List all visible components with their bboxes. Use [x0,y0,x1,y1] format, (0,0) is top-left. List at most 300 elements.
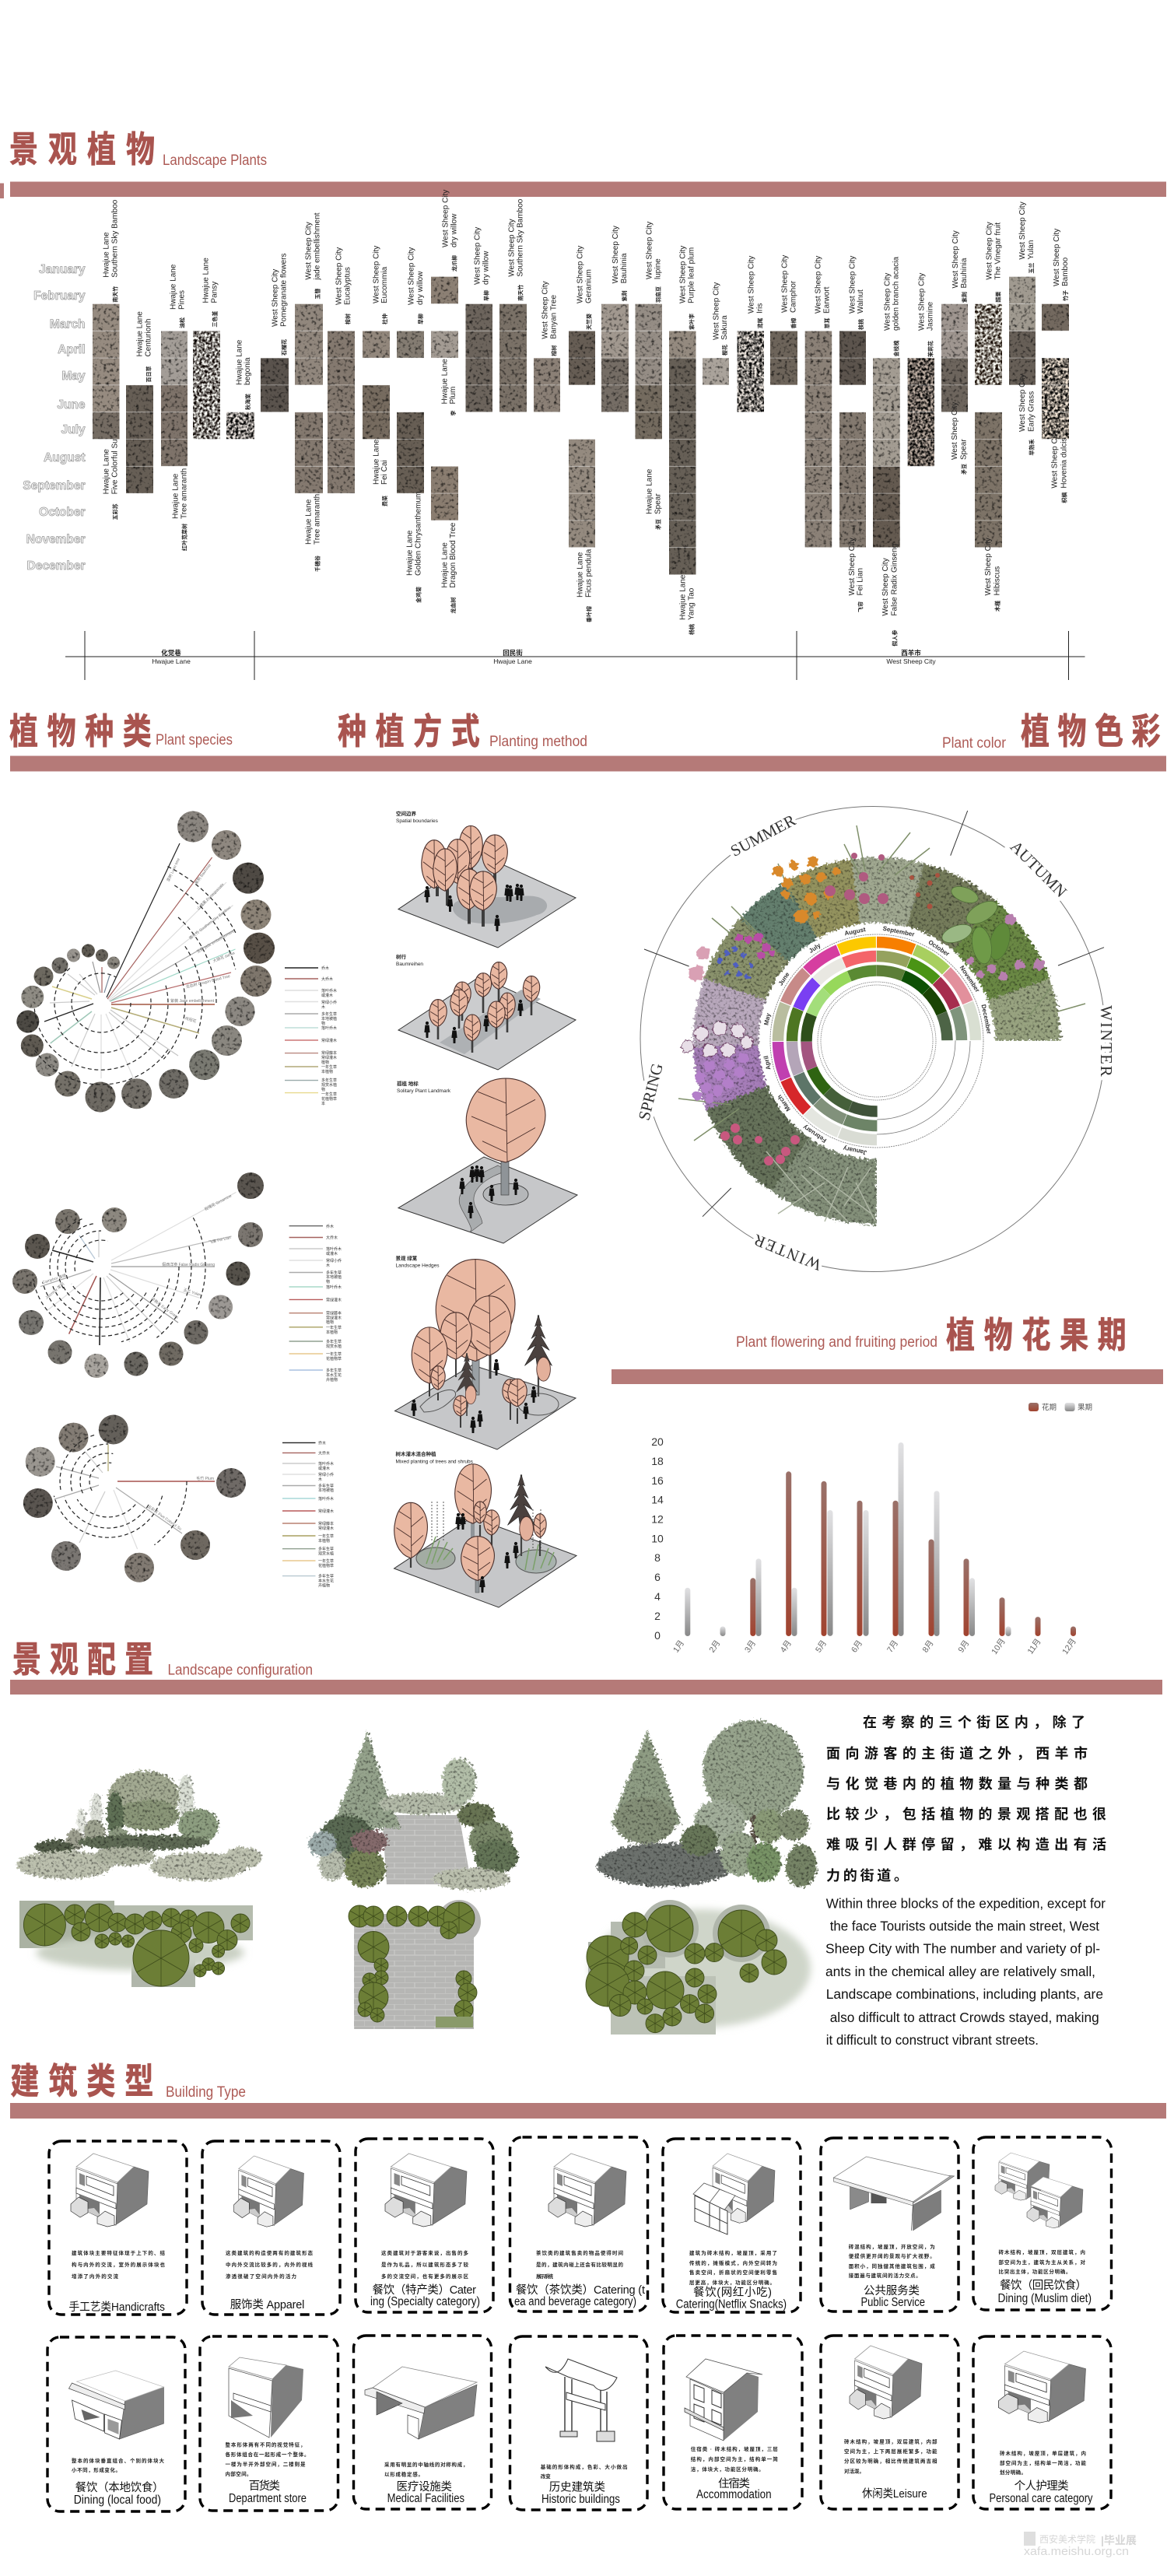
caption: 砖混结构，坡屋顶，开放空间，为 [849,2243,935,2250]
legend: 多年生草 [318,1574,334,1579]
label: Purple leaf plum [678,246,696,330]
month labels on wheel: February [801,1123,828,1144]
label: Tree amaranth 2: Tree amaranth [313,494,322,545]
label: Sakura: Sakura [720,315,729,340]
legend: 物 [321,1087,325,1092]
label: Dragon Blood Tree: 龙血树 [450,598,457,614]
legend: 本地被植 [318,1488,334,1493]
month labels: December [27,559,86,573]
label: Banyan Tree: Banyan Tree [549,295,559,339]
label: False Radix Ginseng: 假人参 [892,630,898,647]
legend [1029,1403,1092,1412]
label: Pines: 油松 [179,317,185,328]
planting elevation 3 [597,1720,817,1887]
caption [999,2248,1086,2275]
label: dry willow: 旱柳 [417,314,424,324]
caption: 这类建筑对于游客来说，出售的多 [381,2249,468,2256]
label: Bauhinia: Bauhinia [620,253,629,283]
label: Five Colorful Su: 五彩苏 [112,503,118,520]
spoke labels: 大丽花 dahlia [212,950,236,964]
label: Pines [170,264,187,328]
label: Yang Tao [678,574,696,635]
icon: building [548,2154,626,2227]
label: Southern Sky Bamboo 2: West Sheep City [507,219,517,277]
spoke labels: 龙血树 Dragon Blood Tree [185,973,231,990]
tree [466,1078,545,1195]
legend: 卉植物 [318,1583,330,1589]
card: Personal care [973,2336,1111,2509]
plant photo circles [12,1172,264,1378]
spoke labels: 早熟禾 Early Grass [149,1296,180,1320]
label: Ficus pendula: Ficus pendula [585,548,593,598]
label: Southern Sky Bamboo: Southern Sky Bamboo [110,199,120,278]
card: Department store [200,2336,338,2511]
legend: 本水生花 [318,1579,334,1584]
label: Hovenia dulcis: Hovenia dulcis [1060,438,1069,489]
card title: Historic buildings [541,2493,620,2506]
label: Pansy: 三色堇 [212,311,218,328]
planting elevation 2 [308,1731,518,1890]
label: The Vinegar fruit: West Sheep City [985,222,994,280]
label: Geranium: 天竺葵 [585,314,593,330]
subtitle: Plant species: Plant species [156,732,233,748]
label: jade embellishment: jade embellishment [313,212,322,281]
season tick lines [644,811,1104,1217]
x axis labels: 12月 [1060,1637,1078,1656]
legend [285,966,337,1106]
title: 植物色彩: 植物色彩 [1021,703,1167,755]
subtitle: Planting method: Planting method [489,734,587,750]
y axis: 8 [654,1551,661,1564]
label: Tree amaranth: 红叶苋菜树 [180,524,188,551]
title: 景观配置: 景观配置 [12,1631,162,1683]
month labels: November [26,533,86,546]
label: Pansy: Pansy [210,282,219,303]
caption [395,1254,440,1268]
label: Sakura: West Sheep City [713,282,720,340]
legend: 植物 [326,1320,334,1325]
label: Early Grass: Early Grass [1027,391,1036,432]
flower bars [750,1471,1076,1636]
label: Centurionh: Centurionh [145,319,152,356]
caption [541,2463,627,2480]
caption [226,2441,310,2477]
month labels on wheel [762,925,993,1156]
legend: 常绿藤本 [321,1050,337,1056]
caption: 售卖空间，折扇状的空间便利零售 [689,2269,777,2276]
plant name labels [103,190,1070,647]
y axis: 20 [651,1435,664,1448]
card title: 餐饮（本地饮食） [75,2481,164,2494]
caption: 中内外交流比较多的，内外的视线 [226,2261,313,2268]
label: Plum: Hwajue Lane [440,359,450,405]
label: Sakura [713,282,729,356]
label: Bamboo: 竹子 [1062,290,1069,301]
label: Yulan: 玉兰 [1028,263,1035,274]
label: Pansy: Hwajue Lane [202,258,210,303]
label: lupine [646,222,663,303]
subtitle: Building Type: Building Type [166,2084,246,2101]
icon: building [999,2351,1086,2423]
month labels: May [61,370,86,383]
street axis: Hwajue Lane [152,657,191,665]
legend: 常绿灌木 [321,1055,337,1060]
label: Early Grass [1018,374,1036,456]
label: Southern Sky Bamboo 2 [507,198,524,301]
green leaves [941,886,1010,964]
text block: English description: Landscape combinations, including plants, are [826,1986,1103,2002]
card: Medical Facilities [353,2336,492,2509]
label: Fei Lian: 飞帘 [857,601,864,612]
spoke labels: 玉兰 Yulan [183,1287,202,1298]
label: Yang Tao: Yang Tao [688,587,696,620]
label: Southern Sky Bamboo 2: 南天竹 [517,285,524,301]
legend: 花植物草 [326,1356,342,1362]
label: Tree amaranth: Hwajue Lane [171,473,180,519]
pink globes [825,853,888,904]
label: Banyan Tree: West Sheep City [541,281,549,339]
watermark: |毕业展 [1101,2534,1137,2546]
card title: 休闲类Leisure [862,2487,927,2501]
season labels: SUMMER [727,811,799,860]
label: Fei Lian: West Sheep City [848,538,857,596]
label: Five Colorful Su: Five Colorful Su [110,439,120,494]
caption [381,2249,468,2280]
caption: 渗透很破了空间内外的活力 [226,2273,296,2280]
caption [691,2445,778,2473]
lilac flowers [692,1053,748,1103]
spoke labels [146,1476,214,1532]
caption: 是的，建筑内碰上还会有比较明显的 [536,2261,624,2268]
caption: 层更高，体块大，功能区分明确。 [689,2279,775,2286]
outer season ring [640,806,1106,1271]
x axis labels: 2月 [707,1638,723,1654]
spoke labels: 紫薇 Jade embellishment [170,998,215,1004]
icon: building [229,2357,303,2438]
label: Pansy [202,258,219,328]
text block: English description [825,1896,1106,2048]
street axis: 化觉巷 [161,649,181,657]
inner ring: foliage colors [777,941,976,1141]
caption: 孤植 地标 [397,1080,419,1087]
month labels on wheel: October [927,938,951,958]
berries [909,873,940,909]
label: Walnut: West Sheep City [848,256,857,314]
legend: 本植物 [326,1330,338,1335]
card title: 餐饮（回民饮食） [1000,2279,1087,2292]
platform [398,976,576,1070]
label: Bauhinia: 紫荆 [621,290,628,301]
caption: 基础的形体构成，色彩、大小做出 [541,2463,627,2470]
month labels on wheel: September [882,925,915,938]
caption: 划分明确。 [1000,2469,1026,2476]
label: begonia: 秋海棠 [244,394,251,410]
month labels: January [39,263,86,276]
legend: 常绿灌木 [326,1316,342,1321]
radial chart 1: plant species [16,811,337,1113]
month labels on wheel: April [762,1055,772,1071]
label: Hovenia dulcis: 枳椇 [1061,492,1067,503]
platform [395,1365,576,1449]
card: Leisure [821,2336,958,2509]
legend: 多年生草 [326,1368,342,1373]
card title [387,2480,464,2505]
label: Purple leaf plum: Purple leaf plum [688,247,696,303]
label: Spear: 矛豆 [655,519,661,530]
x axis labels: 6月 [850,1638,864,1654]
label: Pomegranate flowers [271,254,288,356]
label: Fei Cai: Fei Cai [380,460,389,485]
pink flowers [689,946,710,981]
label: Hovenia dulcis [1050,430,1069,503]
label: Southern Sky Bamboo 2: Southern Sky Bamboo [517,198,524,277]
label: Iris: West Sheep City [747,256,756,314]
subtitle: Plant color: Plant color [942,735,1007,752]
legend: 大乔木 [318,1450,330,1456]
label: Bauhinia [612,226,629,301]
y axis: 14 [651,1494,664,1506]
label: False Radix Ginseng [881,544,899,647]
label: The Vinegar fruit [985,222,1002,303]
month labels on wheel: May [762,1012,772,1026]
label: Banyan Tree: 榕树 [551,345,557,356]
ground [19,1901,253,1987]
card: Public Service [821,2138,958,2311]
watermark: 西安美术学院 [1039,2533,1095,2545]
legend: 常绿藤本 [326,1311,342,1316]
planting method 2: baumreihen [396,953,576,1070]
month labels on wheel: March [776,1093,792,1113]
label: Bamboo: Bamboo [1061,257,1070,286]
month labels: March [50,317,86,331]
month labels: February [33,289,86,303]
people [455,1513,519,1593]
label: Five Colorful Su [103,439,120,520]
card title: 百货类 [249,2480,280,2493]
label: golden branch acacia: 金枝槐 [893,341,899,356]
card: Handicrafts [49,2141,187,2315]
label: Dragon Blood Tree: Dragon Blood Tree [449,522,457,588]
card: Dining local [47,2337,185,2511]
card title: 餐饮（茶饮类）Catering (t [516,2283,645,2297]
label: dry willow 2 [442,190,459,272]
label: jade embellishment: 玉簪 [314,289,321,300]
label: False Radix Ginseng: West Sheep City [881,558,890,616]
trees [394,1464,546,1593]
text block: Chinese description: 比较少，包括植物的景观搭配也很 [826,1803,1106,1824]
caption: 接面遍与建筑间的活力交点。 [849,2272,921,2279]
label: Jasmine: Jasmine [926,301,935,331]
caption: 以形成稳定感。 [384,2471,423,2478]
month color rings [737,901,1017,1181]
label: Yulan [1018,202,1036,274]
section bar: configuration [10,1680,1162,1695]
season labels [635,811,1116,1274]
label: Centurionh: 百日草 [145,366,152,383]
legend: 大乔木 [321,976,333,982]
tree tops [23,1904,250,1986]
section bar: flowering [612,1369,1163,1384]
card title: Dining (Muslim diet) [997,2292,1092,2305]
subtitle: Landscape Plants: Landscape Plants [163,152,267,169]
icon: gate [545,2359,617,2441]
label: Spear [646,468,663,530]
legend: 常绿灌木 [321,1038,337,1043]
label: The Vinegar fruit: The Vinegar fruit [994,223,1002,280]
radial chart 2: plant species [12,1172,342,1383]
label: Earwort: West Sheep City [814,256,823,314]
title: 种植方式: 种植方式 [338,703,489,755]
spoke labels: 南天竹 Southern Sky Bamboo [188,905,232,941]
label: Golden Chrysanthemum: 金鸡菊 [415,587,422,603]
spoke labels: 鸡冠花 [184,1015,197,1024]
label: Iris [747,256,764,328]
plants [308,1731,518,1890]
icon: building [233,2156,303,2227]
label: Yang Tao: 杨桃 [688,624,696,635]
paving [382,1815,471,1884]
caption: 面积小，同独健其他建筑包围，成 [849,2262,935,2269]
label: dry willow: West Sheep City [408,247,415,305]
card title: 公共服务类 [864,2284,920,2297]
label: Yang Tao: Hwajue Lane [678,574,688,620]
label: jade embellishment: West Sheep City [305,222,313,280]
caption: 结构，内部空间为主，结构单一简 [691,2455,778,2462]
label: Camphor [781,255,798,328]
label: Fei Lian [848,538,865,612]
label: Jasmine: West Sheep City [918,273,926,331]
plant photo circles [16,811,275,1113]
label: Spear: Hwajue Lane [646,468,654,514]
label: Purple leaf plum: 紫叶李 [688,314,696,330]
spokes [54,1444,215,1549]
label: Ficus pendula: 垂叶榕 [585,606,593,622]
label: Camphor: 香樟 [790,317,797,328]
caption: 是作为礼品，所以建筑形态多了较 [381,2261,468,2268]
caption [536,2249,624,2280]
text block: Chinese description [826,1712,1106,1885]
caption: 采用有明显的中轴线的对称构成， [384,2461,468,2468]
legend: 多年生草 [321,1078,337,1083]
legend: 常绿灌木 [318,1509,334,1514]
label: dry willow: dry willow [416,271,425,305]
label: Geranium [576,246,593,330]
caption: 住宿类 · 砖木结构，坡屋顶，三层 [691,2445,778,2452]
legend: 花期 [1042,1403,1057,1412]
label: Fei Cai [372,439,389,506]
icon: building [385,2154,467,2227]
spoke labels: 假西洋参 False Radix Ginseng [162,1262,215,1267]
label: Bauhinia 2: 紫荆 [961,292,968,303]
card title: 住宿类 [718,2477,750,2490]
people [424,1000,524,1043]
title: 景观植物: 景观植物 [9,121,165,173]
label: Eucommia: 杜仲 [381,314,388,324]
spoke labels: 飞廉 Fei Lian [208,1235,232,1246]
legend: 落叶乔木 [318,1496,334,1502]
label: Bauhinia 2: Bauhinia [960,258,969,288]
card title: ing (Specialty category) [370,2295,480,2308]
label: Jasmine [918,273,935,357]
label: Jasmine: 茉莉花 [927,341,934,357]
legend: 或灌木 [321,993,333,998]
label: Early Grass: West Sheep City [1018,374,1027,432]
legend: 物 [321,1021,325,1026]
legend: 常绿灌木 [318,1526,334,1531]
card title [370,2283,480,2308]
title: 建筑类型: 建筑类型 [10,2052,163,2105]
street axis [65,631,1085,680]
legend: 常绿小乔 [326,1258,342,1263]
legend: 木 [326,1263,330,1268]
legend: 花植物草 [318,1563,334,1568]
label: dry willow 2: dry willow [450,213,459,247]
legend: 卉植物 [326,1377,338,1383]
legend: 落叶乔木 [318,1461,334,1467]
label: Pomegranate flowers: West Sheep City [271,269,280,327]
planting plan 1 [19,1901,253,1987]
street axis: Hwajue Lane [493,657,532,665]
legend: 一年生草 [326,1351,342,1357]
caption: 树木灌木混合种植 [395,1450,436,1457]
caption: 一楼为半开外部空间，二楼则是 [226,2461,306,2468]
icon: building [693,2154,775,2234]
label: Hovenia dulcis: West Sheep City [1050,430,1060,489]
spokes [44,843,235,1078]
label: Fei Cai: 费菜 [381,496,388,506]
text block: English description: the face Tourists outside the main street, West [830,1919,1099,1934]
legend: 乔木 [318,1441,326,1446]
caption [396,953,423,967]
subtitle: Landscape configuration: Landscape configuration [168,1662,313,1679]
caption: 改变 [541,2473,551,2480]
caption: 比突出主体，功能区分明确。 [999,2268,1071,2275]
blue flowers [717,946,753,979]
card title: Accommodation [696,2488,772,2501]
pale flowers [682,1022,753,1057]
icon: building [71,2154,149,2227]
caption [72,2457,165,2473]
month labels: April [58,343,86,356]
caption [844,2438,937,2475]
legend: 一年生草 [321,1064,337,1070]
label: The Vinegar fruit: 醋栗 [994,292,1002,303]
season wheel: plant color [635,806,1116,1274]
label: Golden Chrysanthemum: Golden Chrysanthemum [414,492,423,576]
caption: Landscape Hedges [395,1263,440,1268]
planting method 5: mixed planting [394,1450,576,1607]
y axis: 2 [654,1610,661,1622]
card: Historic buildings [510,2336,647,2510]
label: Eucommia: West Sheep City [372,246,381,303]
x axis labels: 8月 [920,1638,936,1654]
label: Southern Sky Bamboo [103,199,120,303]
label: Purple leaf plum: West Sheep City [678,246,688,303]
caption: Mixed planting of trees and shrubs [395,1460,474,1464]
planting method 3: solitary plant landmark [397,1078,577,1243]
legend: 本地被植 [326,1274,342,1280]
caption [396,810,439,824]
label: Hibiscus [984,538,1002,612]
label: Hibiscus: 木槿 [994,601,1001,612]
legend: 物 [326,1279,330,1284]
platform [398,854,576,948]
caption [384,2461,468,2478]
label: Pomegranate flowers: 石榴花 [280,339,288,356]
text block: Chinese description: 力的街道。 [826,1865,908,1885]
legend: 多年生草 [318,1547,334,1552]
legend: 常绿小乔 [321,1000,337,1005]
